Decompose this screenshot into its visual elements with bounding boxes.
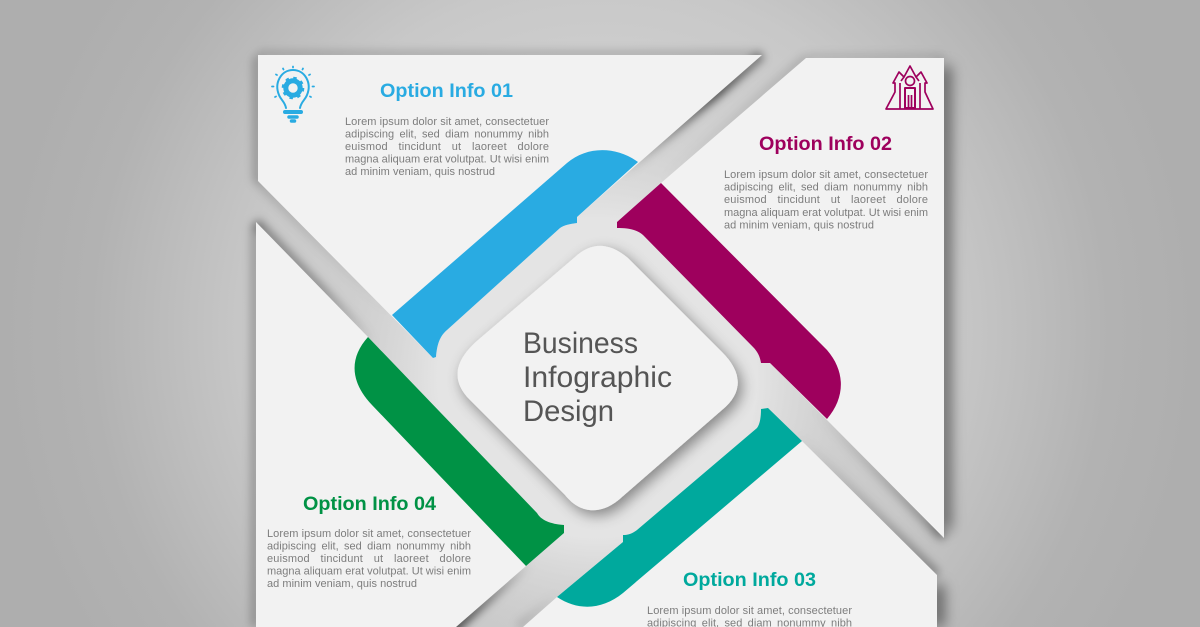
text block: adipiscing elit, sed diam nonummy nibh xyxy=(724,182,928,194)
right edge shadows xyxy=(937,66,944,627)
text block: Lorem ipsum dolor sit amet, consectetuer xyxy=(647,605,852,617)
text block: Lorem ipsum dolor sit amet, consectetuer xyxy=(267,528,471,540)
centre heading: Design xyxy=(523,395,614,428)
text block: euismod tincidunt ut laoreet dolore xyxy=(724,194,928,206)
band: blue xyxy=(392,150,638,358)
icon: person with arrows xyxy=(886,66,933,109)
text block: magna aliquam erat volutpat. Ut wisi enim xyxy=(345,154,549,166)
title: Option Info 02 xyxy=(759,134,892,155)
centre heading: Infographic xyxy=(523,361,672,394)
title: Option Info 03 xyxy=(683,570,816,591)
text block xyxy=(724,169,928,232)
band: teal xyxy=(557,408,802,607)
text block: ad minim veniam, quis nostrud xyxy=(724,220,874,232)
icon: light bulb with gear xyxy=(272,66,314,121)
centre glow xyxy=(332,113,862,627)
text block: magna aliquam erat volutpat. Ut wisi enim xyxy=(724,207,928,219)
band: magenta xyxy=(617,183,841,419)
text block: euismod tincidunt ut laoreet dolore xyxy=(345,141,549,153)
title: Option Info 04 xyxy=(303,494,436,515)
panel: option 01 xyxy=(258,55,762,358)
text block: magna aliquam erat volutpat. Ut wisi enim xyxy=(267,566,471,578)
text block xyxy=(267,528,471,590)
panel: option 03 xyxy=(523,408,937,627)
text block: Lorem ipsum dolor sit amet, consectetuer xyxy=(345,116,549,128)
centre diamond xyxy=(458,246,738,510)
text block xyxy=(345,116,549,178)
title: Option Info 01 xyxy=(380,81,513,102)
band: green xyxy=(355,337,564,566)
text block: Lorem ipsum dolor sit amet, consectetuer xyxy=(724,169,928,181)
text block: adipiscing elit, sed diam nonummy nibh xyxy=(267,540,471,552)
text block xyxy=(647,605,852,627)
panel: option 04 xyxy=(256,222,564,627)
panel shadows xyxy=(255,54,944,627)
text block: ad minim veniam, quis nostrud xyxy=(345,166,495,178)
centre heading: Business xyxy=(523,327,638,360)
centre heading xyxy=(523,327,672,428)
text block: adipiscing elit, sed diam nonummy nibh xyxy=(345,128,549,140)
text block: ad minim veniam, quis nostrud xyxy=(267,578,417,590)
panel: option 02 xyxy=(617,58,944,538)
text block: euismod tincidunt ut laoreet dolore xyxy=(267,553,471,565)
